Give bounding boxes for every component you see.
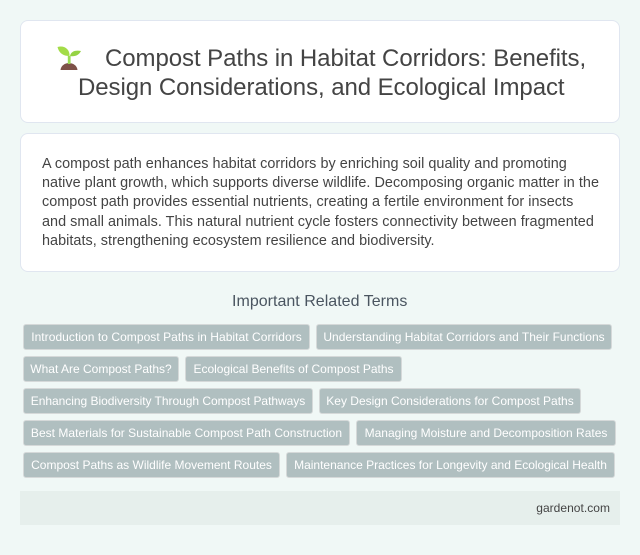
tag: [23, 452, 280, 478]
tag: [319, 388, 581, 414]
text: description: [42, 156, 599, 249]
tag: [23, 388, 313, 414]
tag: Managing Moisture and Decomposition Rates: [365, 426, 607, 440]
title line 1: Compost Paths in Habitat Corridors: Benefits,: [105, 45, 586, 72]
text: description: and small animals. This natural nutrient cycle fosters connectivity between fragmented: [42, 214, 594, 230]
heading: related terms: Important Related Terms: [232, 293, 407, 310]
tag: Compost Paths as Wildlife Movement Routes: [31, 458, 272, 472]
text: description: compost path provides essential nutrients, creating a fertile environment for insects: [42, 194, 573, 210]
tag: Introduction to Compost Paths in Habitat Corridors: [31, 330, 302, 344]
footer source: gardenot.com: [536, 501, 610, 515]
tag: [23, 324, 310, 350]
text: description: habitats, strengthening ecosystem resilience and biodiversity.: [42, 233, 435, 249]
icon: seedling: [58, 46, 81, 70]
title line 2: Design Considerations, and Ecological Impact: [78, 74, 565, 101]
tag: [286, 452, 615, 478]
panel: title card: [20, 20, 620, 123]
tag: Ecological Benefits of Compost Paths: [193, 362, 394, 376]
tag: [316, 324, 612, 350]
tag: Key Design Considerations for Compost Paths: [326, 394, 574, 408]
tag: [185, 356, 402, 382]
text: description: A compost path enhances habitat corridors by enriching soil quality and promoting: [42, 156, 567, 172]
tag: What Are Compost Paths?: [30, 362, 172, 376]
footer: [20, 491, 620, 525]
tag: Understanding Habitat Corridors and Their Functions: [323, 330, 605, 344]
tag: Enhancing Biodiversity Through Compost Pathways: [31, 394, 305, 408]
tag: [23, 356, 179, 382]
panel: description card: [20, 133, 620, 272]
tag: [23, 420, 350, 446]
tag: [356, 420, 616, 446]
tag: Best Materials for Sustainable Compost Path Construction: [31, 426, 342, 440]
text: description: native plant growth, which supports diverse wildlife. Decomposing organic matter in the: [42, 175, 599, 191]
tag: Maintenance Practices for Longevity and Ecological Health: [294, 458, 607, 472]
